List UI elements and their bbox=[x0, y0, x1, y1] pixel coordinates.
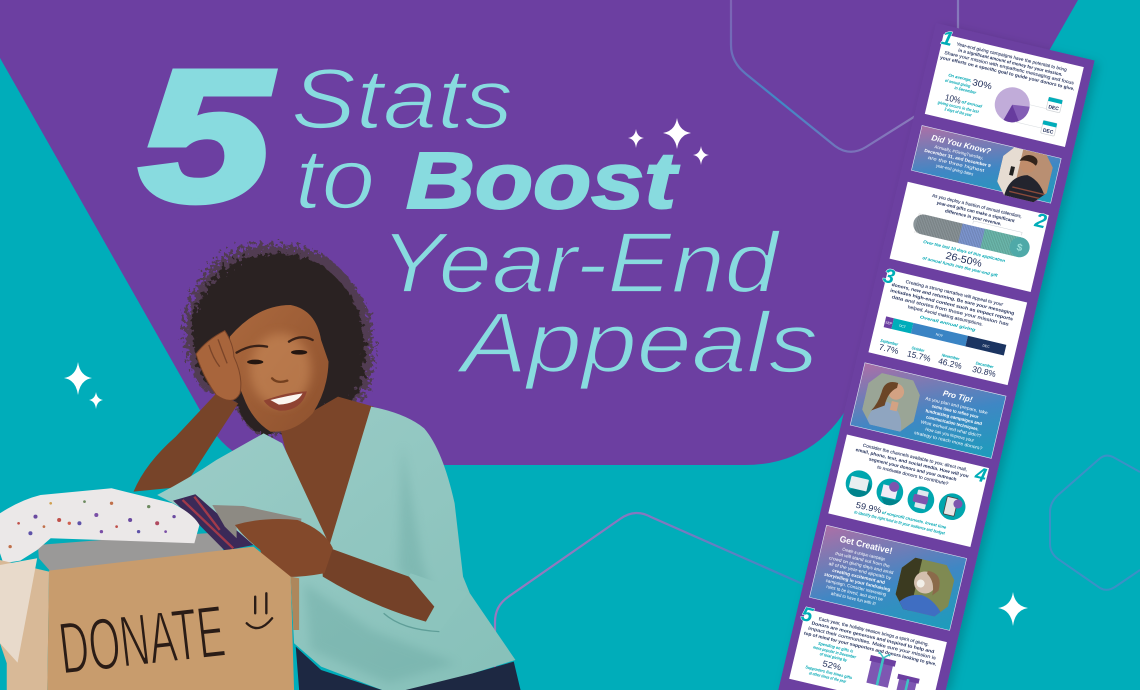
cuff edge bbox=[384, 613, 439, 632]
stat: 59.9%: to identify the right fund to fit your audience and budget bbox=[854, 509, 946, 536]
stat: 30%: 30% bbox=[971, 77, 993, 91]
panel: did you know bbox=[910, 124, 1062, 208]
icon: sparkles left bbox=[64, 362, 103, 409]
title: Stats: Stats bbox=[291, 52, 513, 147]
sweater bbox=[0, 488, 199, 563]
stat: 26-50%: Over the last 10 days of this application bbox=[923, 239, 1006, 263]
get creative text: storytelling in your fundraising bbox=[824, 572, 891, 592]
stacked bar chart: OCT bbox=[898, 324, 906, 329]
smiley bbox=[247, 593, 272, 628]
number 3: 3 bbox=[881, 265, 897, 289]
shirt bbox=[157, 407, 515, 690]
strip background bbox=[778, 23, 1095, 690]
icon: sparkles near title bbox=[628, 118, 709, 165]
stat: 10% bbox=[935, 91, 984, 120]
photo: man with phone bbox=[997, 148, 1053, 202]
hand bbox=[235, 519, 333, 577]
icon: sparkle bottom right bbox=[998, 592, 1028, 626]
panel 3 text: data and stories from those your mission has bbox=[891, 294, 1010, 327]
hexagon outline: right bbox=[1050, 456, 1140, 590]
panel 2 text: As you deploy a fraction of annual calendars, bbox=[932, 193, 1022, 219]
stat: 10%: giving occurs in the last bbox=[936, 99, 980, 114]
panel 1 intro text bbox=[940, 38, 1079, 91]
icon: large gift box bbox=[864, 651, 897, 688]
face bbox=[230, 305, 329, 432]
panel 4 text: Consider the channels available to you: direct mail, bbox=[862, 443, 968, 472]
month stats: 15.7% bbox=[906, 348, 932, 364]
panel 4 text: segment your donors and your outreach bbox=[868, 456, 957, 482]
nose bbox=[272, 378, 287, 382]
coin stack chart bbox=[911, 212, 1032, 259]
number 5: 5 bbox=[799, 603, 816, 627]
calendar: 31 DEC bbox=[1040, 120, 1057, 136]
month stats: November bbox=[941, 352, 960, 361]
panel: stat 2 bbox=[890, 179, 1050, 292]
pro tip text bbox=[914, 395, 992, 451]
stacked bar chart bbox=[884, 316, 1006, 356]
get creative heading: Get Creative! bbox=[839, 534, 893, 556]
pro tip heading: Pro Tip! bbox=[942, 389, 974, 404]
stat: 52%: of total giving by bbox=[819, 651, 848, 663]
icon: direct mail bbox=[843, 468, 875, 500]
infographic preview strip bbox=[778, 23, 1095, 690]
stat: 10%: of annual bbox=[961, 99, 984, 109]
get creative text: Create a unique campaign bbox=[842, 547, 886, 562]
pro tip text: As you plan and prepare, take bbox=[925, 396, 989, 415]
plaid red accents bbox=[183, 497, 233, 548]
coin stack chart: $ bbox=[1015, 242, 1024, 254]
shirt shading bbox=[304, 443, 456, 683]
hair bbox=[192, 254, 365, 435]
get creative text: afraid to have fun with it! bbox=[830, 591, 876, 606]
stat: 59.9% bbox=[854, 500, 948, 536]
jeans bbox=[296, 647, 521, 690]
pro tip text: What worked and what didn't? bbox=[920, 419, 982, 439]
icon: small gift box bbox=[896, 674, 920, 690]
smile bbox=[264, 391, 307, 411]
background: purple shape bbox=[0, 0, 1078, 465]
did you know text bbox=[921, 142, 993, 180]
stat: 26-50% bbox=[919, 239, 1006, 279]
icon: text message bbox=[905, 484, 937, 516]
panel 3 text: helped. Avoid making assumptions. bbox=[907, 304, 984, 327]
stat: 52%: Supporters five times gifts bbox=[805, 664, 853, 680]
month stats bbox=[878, 338, 998, 379]
panel 2 text: year-end gifts can make a significant bbox=[936, 200, 1016, 223]
title: big numeral 5: 5 bbox=[140, 33, 273, 240]
title: to: to bbox=[295, 132, 375, 227]
month stats: 7.7% bbox=[878, 342, 900, 356]
face highlight bbox=[250, 333, 311, 407]
chart caption: Overall annual giving bbox=[919, 314, 977, 332]
connector lines bbox=[1015, 102, 1046, 128]
panel 5 text: Donors are more generous and inspired to help and bbox=[811, 620, 935, 654]
did you know text: Annually, #GivingTuesday, bbox=[934, 144, 984, 160]
panel: get creative bbox=[809, 525, 967, 630]
pro tip text: fundraising campaigns and bbox=[925, 408, 983, 426]
get creative text: crowd on giving days and amid bbox=[829, 555, 894, 575]
photo: woman thinking bbox=[862, 373, 920, 432]
did you know background bbox=[911, 126, 1061, 203]
stat: 10%: 10% bbox=[944, 92, 962, 106]
panel 1 intro text: in a significant amount of money for your mission. bbox=[958, 48, 1063, 77]
stat: 30%: On average, bbox=[948, 72, 972, 83]
sweater dots bbox=[8, 500, 176, 548]
box front bbox=[47, 547, 294, 690]
get creative text: rules to be loved, and don't be bbox=[826, 584, 884, 602]
bracket line bbox=[973, 221, 1022, 235]
stat: 30% bbox=[943, 71, 993, 98]
icon: mobile phone bbox=[936, 491, 968, 523]
did you know text: December 31, and December 9 bbox=[924, 148, 992, 168]
calendar: DEC bbox=[1046, 97, 1063, 113]
hexagon outline: bottom centre bbox=[495, 513, 805, 690]
hair frizz halo bbox=[184, 245, 373, 437]
panel 1 background bbox=[925, 34, 1084, 147]
stat: 52%: 52% bbox=[822, 658, 843, 672]
stacked bar chart: SEP bbox=[885, 320, 893, 326]
stat: 52%: Spending on gifts is bbox=[818, 641, 854, 654]
panel: stat 3 bbox=[866, 265, 1028, 385]
panel 3 text: donors, new and returning. Be sure your messaging bbox=[891, 282, 1015, 316]
panel 2 text: difference in your revenue. bbox=[945, 208, 1002, 226]
title: Appeals: Appeals bbox=[455, 296, 818, 391]
month stats: 46.2% bbox=[937, 356, 963, 371]
pro tip text: How can you improve your bbox=[925, 426, 975, 443]
stat: 52%: more popular in December bbox=[813, 645, 857, 660]
get creative text: creating excitement and bbox=[832, 568, 886, 585]
number 1: 1 bbox=[939, 27, 955, 51]
pie chart bbox=[991, 84, 1033, 126]
panel 5 text: impact their communities. Make sure your mission is bbox=[808, 626, 937, 661]
gray knit in box bbox=[38, 533, 224, 572]
month stats: October bbox=[911, 345, 925, 353]
get creative background bbox=[809, 525, 967, 630]
panel: stat 1 bbox=[924, 27, 1085, 147]
panel 3 text: Creating a strong narrative will appeal to your bbox=[905, 279, 1004, 307]
did you know text: are the three highest bbox=[927, 155, 986, 173]
stat: 26-50%: of annual funds into the year-end gift bbox=[922, 255, 999, 278]
calendar: 31 DEC: DEC bbox=[1042, 128, 1054, 136]
panel 3 text: includes high-end content such as impact reports bbox=[890, 288, 1014, 322]
calendar: DEC: DEC bbox=[1048, 104, 1060, 113]
panel 2 background bbox=[890, 182, 1049, 292]
month stats: 30.8% bbox=[971, 364, 997, 379]
gray folded cloth bbox=[212, 505, 301, 538]
month stats: December bbox=[975, 360, 994, 369]
panel 5 text: top of mind for your supporters and donors looking to give. bbox=[804, 630, 937, 667]
panel 1 intro text: Year-end giving campaigns have the potential to bring bbox=[956, 41, 1068, 72]
fist bbox=[196, 331, 241, 400]
panel 1 intro text: Share your mission with empathetic messaging and focus bbox=[944, 50, 1075, 86]
panel: stat 5 bbox=[789, 603, 947, 690]
panel 3 text bbox=[887, 276, 1017, 333]
stat: 30%: of annual giving bbox=[945, 78, 971, 89]
panel 3 background bbox=[868, 270, 1027, 385]
title: Boost: Boost bbox=[406, 136, 680, 225]
photo: woman with donation box bbox=[0, 245, 521, 690]
number 4: 4 bbox=[972, 463, 989, 487]
panel 4 text bbox=[852, 441, 971, 490]
raised arm bbox=[134, 393, 238, 492]
fist fingers bbox=[209, 339, 227, 367]
teeth bbox=[270, 393, 303, 405]
eyes bbox=[247, 350, 307, 364]
get creative text: all of the year-end appeals by bbox=[828, 561, 892, 581]
stat: 30%: in December bbox=[954, 85, 977, 95]
plaid cloth bbox=[173, 494, 254, 551]
box left flap and side bbox=[0, 560, 49, 690]
photo: woman with pie on face bbox=[896, 558, 954, 616]
get creative text: that will stand out from the bbox=[835, 551, 891, 569]
pro tip background bbox=[850, 363, 1006, 458]
box open flap bbox=[0, 558, 37, 663]
title bbox=[140, 33, 818, 391]
eyebrows bbox=[237, 337, 313, 353]
panel 4 text: email, phone, text, and social media. How will you bbox=[855, 447, 969, 479]
stat: 59.9%: 59.9% bbox=[855, 500, 883, 515]
stat: 59.9%: of nonprofit channels. Invest time bbox=[881, 510, 947, 530]
get creative text bbox=[820, 544, 898, 609]
box right flap bbox=[291, 577, 299, 630]
pro tip text: some time to refine your bbox=[931, 403, 979, 419]
panel 5 text: Each year, the holiday season brings a spirit of giving. bbox=[818, 616, 929, 647]
panel: stat 4 bbox=[828, 433, 989, 547]
right forearm bbox=[321, 545, 434, 622]
panel 5 background bbox=[789, 609, 947, 690]
pro tip text: strategy to reach more donors? bbox=[914, 430, 983, 451]
did you know text: year-end giving dates bbox=[936, 163, 974, 177]
panel 5 text bbox=[804, 614, 941, 667]
month stats: September bbox=[880, 338, 899, 347]
panel 1 intro text: your efforts on a specific goal to guide your donors to give. bbox=[940, 55, 1075, 91]
stat: 52%: at other times of the year bbox=[809, 670, 847, 684]
get creative text: campaign. Consider interesting bbox=[825, 578, 887, 597]
stacked bar chart: DEC bbox=[982, 343, 990, 349]
pro tip text: communication techniques. bbox=[926, 414, 979, 432]
panel: pro tip bbox=[850, 363, 1006, 458]
hexagon outline: top right bbox=[731, 0, 960, 152]
number 2: 2 bbox=[1032, 209, 1049, 233]
panel 4 background bbox=[828, 435, 989, 547]
stat: 52% bbox=[804, 639, 859, 685]
did you know heading: Did You Know? bbox=[930, 133, 992, 156]
DONATE lettering: DONATE bbox=[55, 589, 229, 690]
stat: 10%: 3 days of the year bbox=[944, 106, 973, 118]
stacked bar chart: NOV bbox=[935, 332, 944, 338]
title: Year-End: Year-End bbox=[380, 216, 781, 311]
panel 2 text bbox=[929, 193, 1022, 231]
neck and chest bbox=[281, 397, 373, 547]
stat: 26-50%: 26-50% bbox=[944, 251, 983, 270]
panel 4 text: to motivate donors to contribute? bbox=[877, 464, 949, 486]
icon: email bbox=[874, 476, 906, 508]
cuff bbox=[384, 573, 468, 632]
